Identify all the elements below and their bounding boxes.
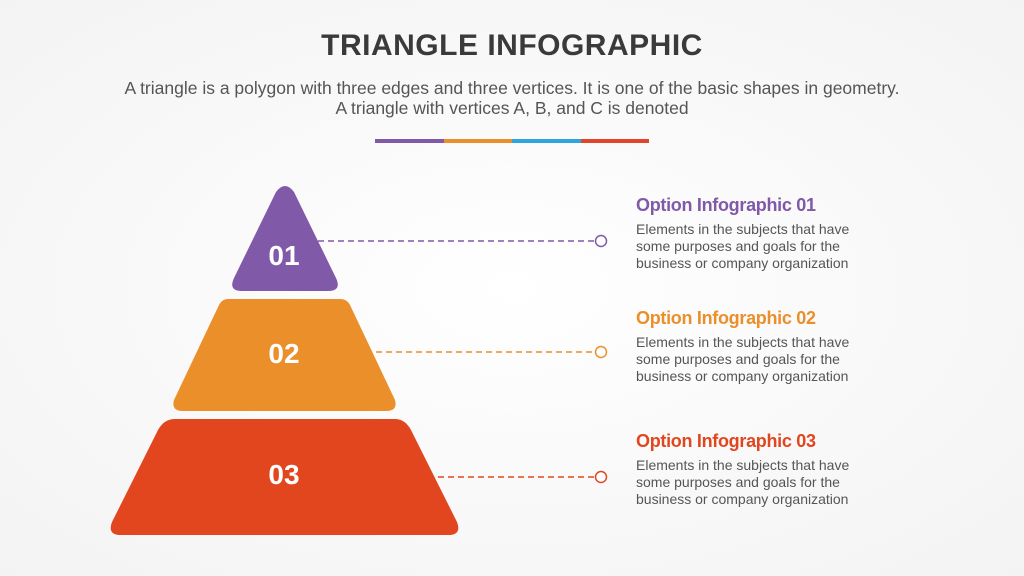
tier 03 — [111, 419, 458, 535]
option 02: some purposes and goals for the — [636, 351, 840, 367]
option 01: Option Infographic 01 — [636, 195, 816, 215]
title: TRIANGLE INFOGRAPHIC — [321, 29, 703, 62]
tier 02: 02 — [268, 338, 300, 369]
connector 02 — [376, 346, 606, 358]
option 02: business or company organization — [636, 368, 848, 384]
subtitle — [124, 78, 899, 118]
subtitle: A triangle with vertices A, B, and C is denoted — [335, 98, 689, 118]
option 01: some purposes and goals for the — [636, 238, 840, 254]
connector 03 — [438, 472, 606, 482]
option 03: Elements in the subjects that have — [636, 457, 849, 473]
tier 02 — [173, 299, 396, 411]
option 01: Elements in the subjects that have — [636, 221, 849, 237]
option 01: business or company organization — [636, 255, 848, 271]
option 01 — [636, 195, 849, 271]
option 02: Option Infographic 02 — [636, 308, 816, 328]
option 02: Elements in the subjects that have — [636, 334, 849, 350]
option 03: some purposes and goals for the — [636, 474, 840, 490]
option 02 — [636, 308, 849, 384]
option 03: Option Infographic 03 — [636, 431, 816, 451]
tier 01: 01 — [268, 240, 300, 271]
tier 01 — [232, 186, 338, 291]
color bar — [375, 139, 649, 143]
subtitle: A triangle is a polygon with three edges and three vertices. It is one of the basic shapes in geometry. — [124, 78, 899, 98]
connector 01 — [318, 236, 606, 246]
option 03 — [636, 431, 849, 507]
option 03: business or company organization — [636, 491, 848, 507]
tier 03: 03 — [268, 459, 300, 490]
